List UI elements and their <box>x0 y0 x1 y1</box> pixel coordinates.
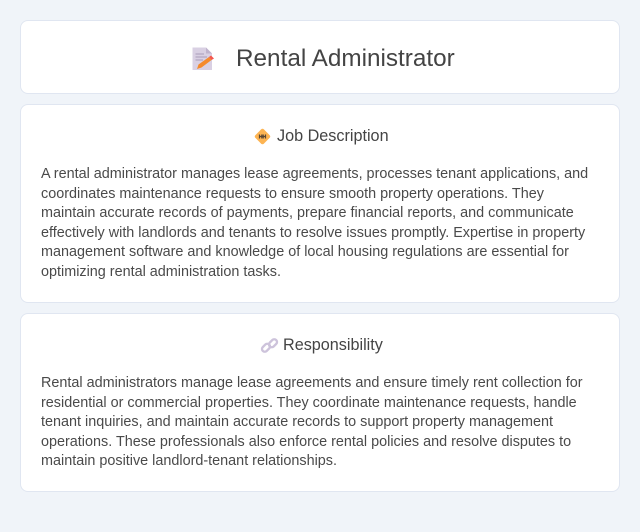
panel: responsibility <box>20 313 620 492</box>
description text: effectively with landlords and tenants to resolve issues promptly. Expertise in property <box>41 224 585 240</box>
icon: orange diamond sign <box>254 128 270 144</box>
responsibility text: tenant inquiries, and maintain accurate records to support property management <box>41 414 553 430</box>
description text: maintain accurate records of payments, prepare financial reports, and communicate <box>41 205 574 221</box>
responsibility text: maintain positive landlord-tenant relationships. <box>41 453 337 469</box>
responsibility text: Rental administrators manage lease agreements and ensure timely rent collection for <box>41 375 583 391</box>
description text: optimizing rental administration tasks. <box>41 264 281 280</box>
description text <box>41 166 588 280</box>
icon: chain link <box>260 338 278 353</box>
description text: A rental administrator manages lease agreements, processes tenant applications, and <box>41 166 588 182</box>
description text: management software and knowledge of local housing regulations are essential for <box>41 244 569 260</box>
description text: coordinates maintenance requests to ensure smooth property operations. They <box>41 186 544 202</box>
responsibility text: operations. These professionals also enforce rental policies and resolve disputes to <box>41 434 571 450</box>
panel: title card <box>20 20 620 94</box>
heading: job description: Job Description <box>277 127 389 145</box>
responsibility text <box>41 375 583 469</box>
title: Rental Administrator <box>236 45 455 72</box>
icon: document with pencil <box>192 48 214 70</box>
panel: job description <box>20 104 620 303</box>
responsibility text: residential or commercial properties. They coordinate maintenance requests, handle <box>41 394 577 410</box>
heading: responsibility: Responsibility <box>283 336 383 354</box>
